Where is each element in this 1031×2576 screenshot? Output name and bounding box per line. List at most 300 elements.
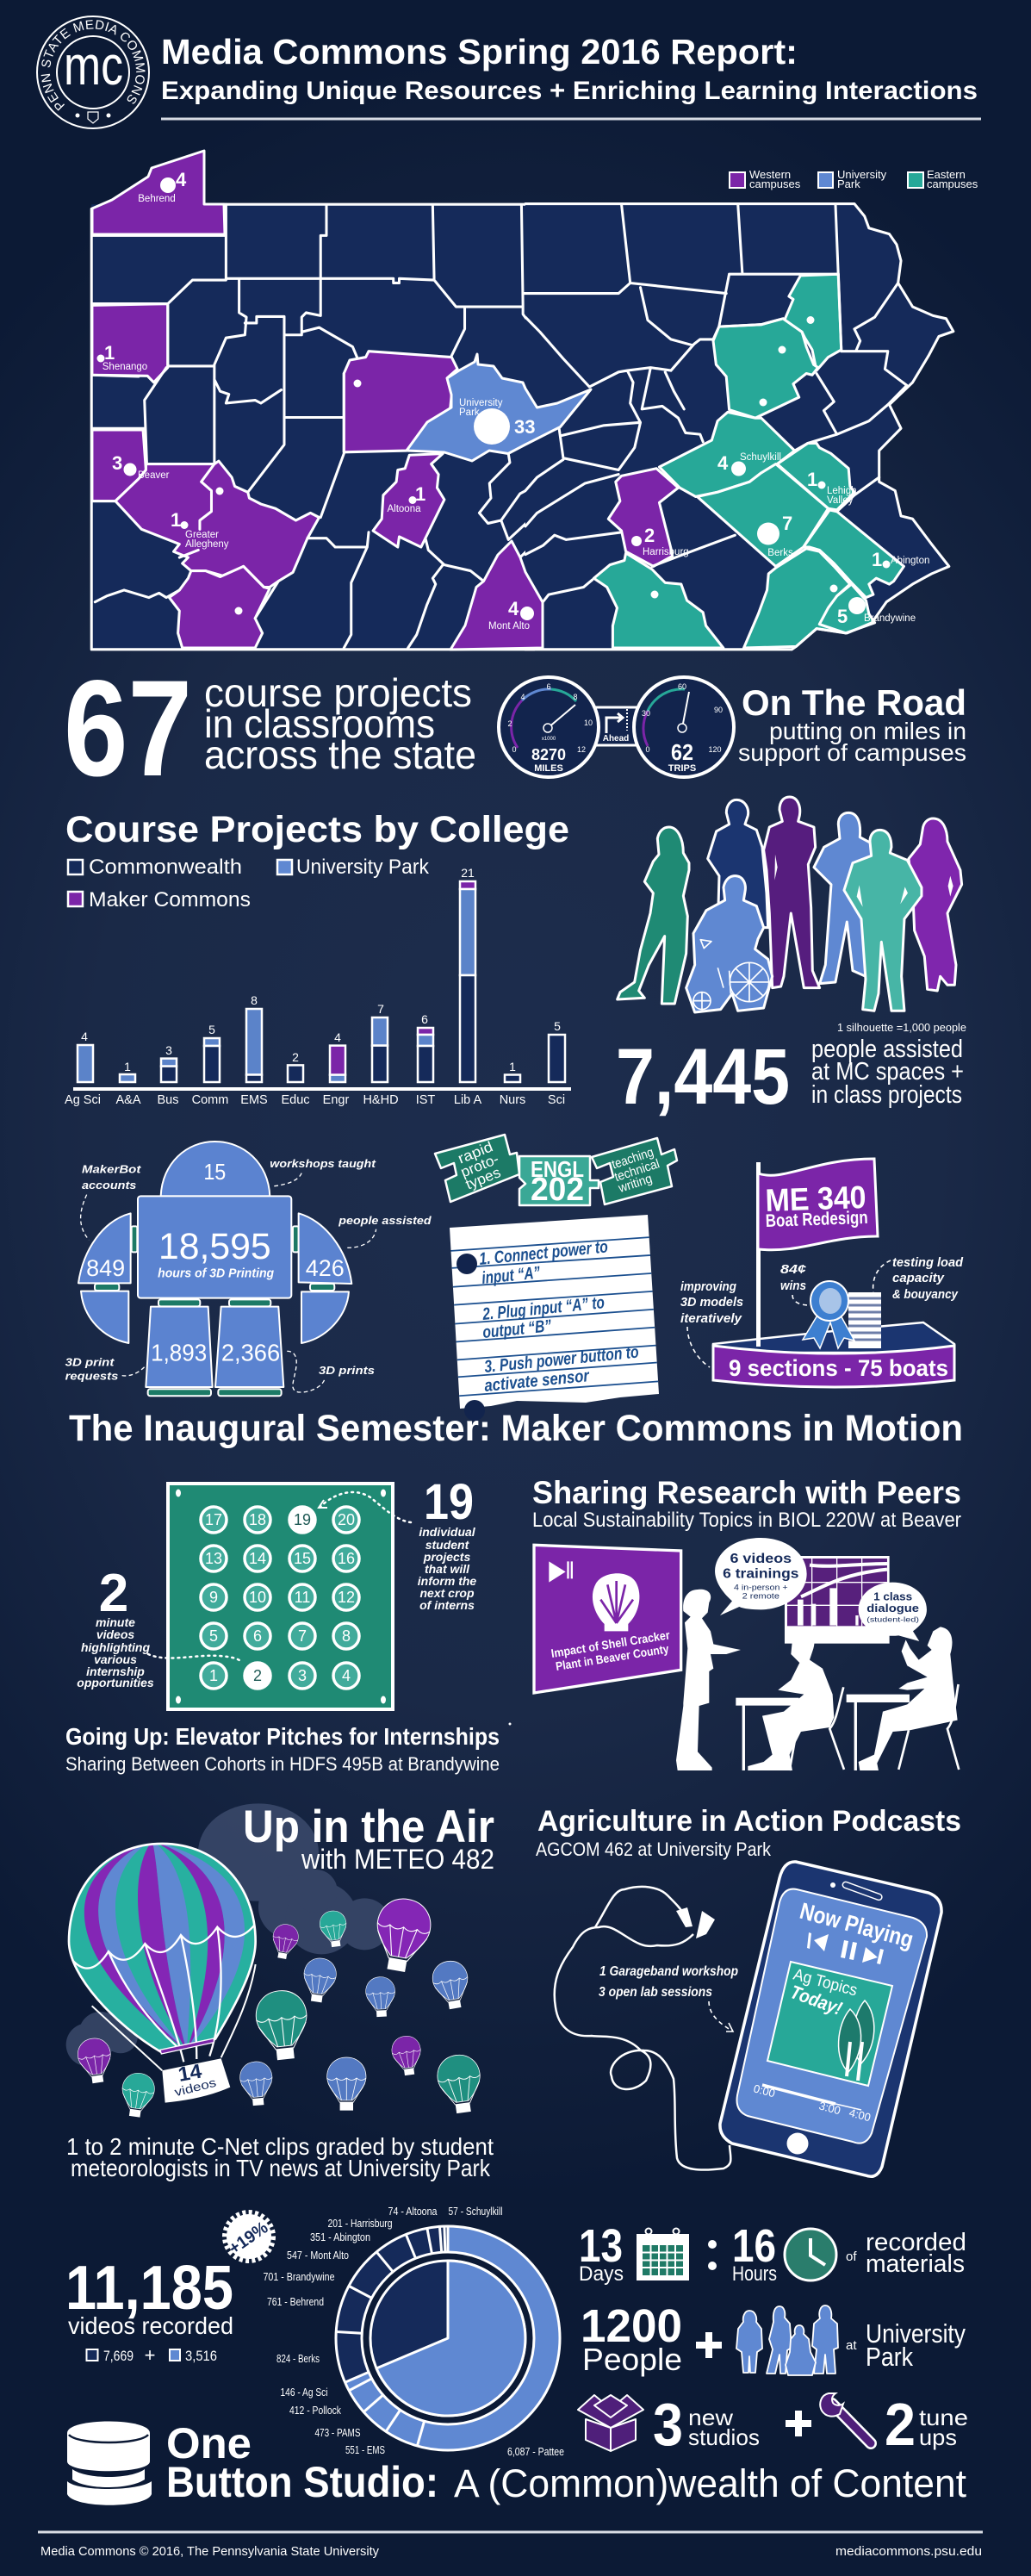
podcast annotation — [599, 1964, 738, 2032]
stat: 11,185 videos recorded: + — [145, 2344, 155, 2366]
boat annotations: & bouyancy — [892, 1287, 959, 1302]
stat: 3 new studios + 2 tune ups: 2 — [885, 2391, 916, 2458]
stat: 7,445 people assisted: at MC spaces + — [811, 1058, 964, 1086]
elevator button numbers: 11 — [295, 1589, 310, 1606]
boat annotations: wins — [780, 1279, 806, 1293]
stat: 1200 people — [581, 2300, 966, 2377]
miles gauge: x1000 — [542, 737, 556, 742]
main balloon: 14 — [177, 2060, 203, 2086]
map: eastern half counties — [525, 204, 953, 650]
main balloon — [63, 1838, 264, 2103]
notebook paper: instructions: 1. Connect power to — [478, 1237, 609, 1269]
region: Behrend Erie county — [92, 151, 225, 234]
map legend: Park — [837, 177, 860, 190]
stat: 2 minute videos: internship — [86, 1664, 145, 1678]
speech bubble: videos and trainings: 4 in-person + — [734, 1584, 788, 1592]
stat: 19 student projects: individual — [419, 1525, 476, 1539]
robot annotations: accounts — [82, 1179, 136, 1192]
stat: 2 minute videos: highlighting — [81, 1640, 150, 1654]
stat: 11,185 videos recorded: 11,185 — [65, 2254, 233, 2323]
phone screen — [737, 1889, 927, 2144]
campus counts and labels: 2 — [644, 525, 655, 546]
donut: labels: 824 - Berks — [276, 2353, 320, 2365]
campus counts and labels: Brandywine — [864, 613, 916, 624]
clouds — [66, 1803, 390, 2066]
speech bubble: videos and trainings: 6 videos — [730, 1552, 792, 1566]
puzzle: ENGL 202 — [519, 1156, 599, 1208]
miles gauge: 2 — [507, 719, 512, 728]
header — [36, 16, 981, 129]
bar chart: course projects by college: 1 — [124, 1060, 131, 1073]
stat: 1200 people: University — [866, 2318, 966, 2349]
miles gauge: 8 — [573, 693, 578, 701]
stat: 19 student projects: that will — [425, 1562, 470, 1576]
elevator button numbers: 9 — [209, 1589, 218, 1606]
stat: 13 days 16 hours: materials — [866, 2250, 965, 2278]
main balloon: scallops and ropes — [72, 1926, 254, 2062]
donut: labels: 146 - Ag Sci — [281, 2386, 327, 2399]
stat: 1200 people: 1200 — [581, 2300, 682, 2352]
stat: 7,445 people assisted: in class projects — [811, 1081, 962, 1109]
icon: calendar — [637, 2228, 689, 2280]
speech bubble: videos and trainings: 6 trainings — [723, 1567, 799, 1582]
silhouette: purple woman — [909, 818, 962, 991]
donut: inner pie — [370, 2261, 525, 2416]
stat: 19 student projects: 19 — [424, 1474, 474, 1530]
stat: 1200 people: Park — [866, 2342, 913, 2372]
bar chart: course projects by college: 5 — [554, 1019, 561, 1033]
stat: 67 course projects: across the state — [204, 732, 476, 777]
classroom scene — [534, 1538, 959, 1770]
ENGL 202 puzzle pieces — [435, 1135, 677, 1208]
heading: On The Road — [738, 682, 966, 766]
silhouette: teal man — [844, 830, 922, 1011]
bar chart: course projects by college: Lib A — [454, 1093, 481, 1107]
campus counts and labels: 4 — [508, 598, 519, 619]
robot numbers: 2,366 — [221, 1339, 280, 1366]
campus counts and labels: Altoona — [387, 504, 421, 514]
heading: Going Up — [65, 1723, 512, 1775]
puzzle: rapid prototypes: rapid — [456, 1138, 495, 1167]
campus counts and labels: Abington — [891, 556, 929, 566]
badge: +19%: +19% — [226, 2218, 272, 2258]
earbud cord — [555, 1887, 730, 2170]
silhouette scale note: 1 silhouette =1,000 people — [837, 1021, 966, 1034]
map legend: Western — [749, 168, 791, 181]
map legend: Eastern — [927, 168, 966, 181]
campus counts and labels: 4 — [176, 169, 187, 190]
elevator button numbers: 6 — [253, 1627, 262, 1645]
logo: Penn State Media Commons seal: PENN STATE MEDIA COMMONS — [41, 20, 145, 111]
bar chart: course projects by college: Comm — [192, 1093, 228, 1107]
donut: labels: 701 - Brandywine — [264, 2271, 335, 2283]
elevator button numbers: 16 — [338, 1550, 355, 1567]
bar chart: course projects by college: 21 — [461, 866, 475, 880]
puzzle: teaching technical writing — [592, 1138, 677, 1204]
paper stack — [848, 1292, 881, 1348]
stat: 7,445 people assisted: people assisted — [811, 1036, 963, 1063]
album card: Ag Topics: Today! — [787, 1981, 845, 2019]
stat: 19 student projects: student — [425, 1538, 470, 1552]
elevator button numbers: 18 — [249, 1511, 266, 1528]
bar chart: course projects by college: 7 — [377, 1002, 384, 1016]
robot numbers: 18,595 — [158, 1226, 271, 1267]
map: western half counties — [91, 204, 534, 650]
notebook paper: instructions: activate sensor — [483, 1366, 591, 1396]
silhouette: teacher — [676, 1590, 741, 1770]
elevator button numbers: 7 — [298, 1627, 307, 1645]
stat: 3 new studios + 2 tune ups: tune — [919, 2405, 968, 2430]
bar chart: course projects by college — [65, 866, 571, 1107]
stat: 2 minute videos — [77, 1564, 242, 1689]
main balloon: envelope stripes — [70, 1845, 255, 2050]
boat annotations: improving — [680, 1279, 736, 1294]
campus counts and labels: 3 — [112, 452, 122, 474]
campus counts and labels: Behrend — [138, 194, 176, 204]
stat: 3 new studios + 2 tune ups: new — [688, 2405, 733, 2430]
earbuds — [676, 1907, 715, 1938]
silhouette: navy man — [708, 800, 768, 928]
stat: 13 days 16 hours: Hours — [732, 2262, 777, 2286]
silhouette: blue man — [814, 812, 879, 984]
elevator button numbers — [205, 1511, 355, 1684]
stat: 7,445 people assisted — [616, 1033, 964, 1121]
One Button Studio: A (Common)wealth of Content — [454, 2461, 966, 2505]
trips gauge: TRIPS — [668, 763, 696, 774]
heading: Course Projects by College: Course Projects by College — [65, 809, 569, 850]
elevator button numbers: 5 — [209, 1627, 218, 1645]
speech bubble: class dialogue: dialogue — [866, 1602, 919, 1615]
silhouettes: people assisted — [618, 797, 962, 1012]
heading: Up in the Air — [243, 1801, 494, 1875]
main balloon: ropes behind — [92, 1964, 256, 2070]
puzzle: rapid prototypes: proto- — [458, 1150, 501, 1180]
playback controls — [807, 1932, 884, 1964]
elevator button numbers: 10 — [249, 1589, 266, 1606]
miles gauge — [499, 677, 599, 777]
elevator button numbers: 12 — [338, 1589, 355, 1606]
stat: 2 minute videos: various — [94, 1652, 137, 1666]
campus counts and labels: 1 — [104, 342, 115, 364]
boat: ME 340 flag and hull: ME 340 — [765, 1179, 866, 1218]
donut: labels: 74 - Altoona — [388, 2206, 438, 2218]
silhouette: person in wheelchair — [686, 876, 773, 1012]
puzzle: teaching technical writing: teaching — [610, 1145, 655, 1173]
footer: mediacommons.psu.edu — [835, 2544, 982, 2559]
subtitle: Expanding Unique Resources + Enriching Learning Interactions — [161, 77, 978, 105]
region: Franklin county Mont Alto — [450, 541, 543, 650]
campus counts and labels: Valley — [827, 495, 854, 506]
footer — [38, 2531, 983, 2559]
bar chart: course projects by college: 5 — [208, 1023, 215, 1036]
projected slide: Impact of Shell Cracker — [550, 1627, 671, 1660]
heading: On The Road: On The Road — [742, 682, 966, 723]
trips gauge — [634, 677, 734, 777]
miles gauge: 6 — [546, 682, 551, 691]
bar chart: course projects by college: EMS — [240, 1093, 268, 1107]
donut: labels: 201 - Harrisburg — [327, 2218, 393, 2230]
campus counts and labels: 1 — [807, 469, 817, 490]
speech bubble: videos and trainings: 2 remote — [742, 1592, 779, 1601]
projected slide — [534, 1545, 681, 1693]
miles gauge: 8270 — [531, 746, 566, 763]
campus counts and labels: 4 — [717, 452, 729, 474]
stat: 2 minute videos: 2 — [99, 1564, 128, 1623]
gauges: On The Road — [499, 677, 734, 777]
phone — [720, 1862, 941, 2176]
boat: ME 340 flag and hull — [680, 1159, 964, 1387]
campus counts and labels: Greater — [185, 530, 219, 540]
campus counts and labels: 1 — [872, 549, 882, 570]
bar chart legend: Maker Commons — [89, 888, 251, 912]
puzzle: teaching technical writing: writing — [616, 1171, 654, 1196]
campus counts and labels: 1 — [415, 483, 425, 505]
campus counts and labels: 7 — [782, 513, 792, 534]
puzzle: ENGL 202: 202 — [531, 1172, 584, 1208]
stat: 19 student projects: of interns — [419, 1598, 475, 1612]
icon: box — [578, 2395, 643, 2451]
speech bubble: videos and trainings — [715, 1538, 807, 1615]
campus counts and labels: 33 — [514, 416, 535, 438]
speech bubble: class dialogue: (student-led) — [866, 1615, 919, 1624]
flag pole — [756, 1162, 761, 1347]
campus counts and labels — [96, 169, 929, 632]
stat: 2 minute videos: opportunities — [77, 1676, 154, 1689]
stat: 11,185 videos recorded — [65, 2254, 233, 2366]
stat: 19 student projects — [319, 1474, 476, 1612]
stat: 13 days 16 hours: 16 — [732, 2220, 776, 2272]
miles gauge: 4 — [520, 693, 525, 701]
campus counts and labels: Schuylkill — [740, 452, 781, 463]
puzzle: teaching technical writing: technical — [612, 1156, 661, 1185]
robot numbers: hours of 3D Printing — [158, 1266, 274, 1280]
stat: 3 new studios + 2 tune ups: ups — [919, 2424, 957, 2450]
campus counts and labels: Shenango — [102, 362, 147, 372]
robot joints — [95, 1226, 334, 1396]
robot annotations: 3D print — [65, 1356, 115, 1369]
map of Pennsylvania campuses — [91, 151, 978, 650]
balloons caption: meteorologists in TV news at University Park — [71, 2155, 491, 2181]
speech bubble: class dialogue: 1 class — [873, 1590, 912, 1602]
donut: labels: 351 - Abington — [310, 2231, 370, 2243]
robot annotations: workshops taught — [270, 1157, 376, 1170]
boat annotations: 84¢ — [780, 1262, 807, 1277]
trips gauge: 60 — [678, 682, 686, 691]
map legend: University — [837, 168, 887, 181]
boat annotations: testing load — [892, 1255, 964, 1270]
miles gauge: 12 — [577, 745, 586, 754]
donut chart: videos by location — [264, 2206, 564, 2458]
stat: 3 new studios + 2 tune ups — [578, 2391, 968, 2458]
album card: Ag Topics: Ag Topics — [792, 1966, 860, 2000]
trips gauge: 62 — [671, 739, 693, 765]
notebook paper: instructions: 3. Push power button to — [483, 1343, 640, 1377]
puzzle: ENGL 202: ENGL — [531, 1156, 584, 1182]
balloons caption: 1 to 2 minute C-Net clips graded by student — [66, 2133, 494, 2160]
bar chart legend: University Park — [296, 856, 430, 879]
donut: labels: 473 - PAMS — [315, 2427, 360, 2439]
puzzle: rapid prototypes: types — [463, 1164, 503, 1193]
elevator button numbers: 15 — [294, 1550, 311, 1567]
campus counts and labels: Berks — [767, 548, 793, 558]
elevator button numbers: 17 — [205, 1511, 222, 1528]
icon: clock — [785, 2229, 836, 2280]
boat: ME 340 flag and hull: Boat Redesign — [765, 1208, 868, 1231]
bar chart legend: Commonwealth — [89, 856, 242, 879]
campus counts and labels: Mont Alto — [488, 621, 530, 632]
stat: 19 student projects: inform the — [418, 1574, 476, 1588]
donut: labels: 761 - Behrend — [267, 2296, 324, 2308]
robot annotations: MakerBot — [82, 1163, 141, 1176]
robot numbers: 15 — [203, 1159, 226, 1185]
elevator button numbers: 13 — [205, 1550, 222, 1567]
bar chart: course projects by college: 8 — [251, 993, 258, 1007]
stat: 2 minute videos: videos — [96, 1627, 134, 1641]
robot numbers: 426 — [306, 1255, 345, 1281]
robot annotations: requests — [65, 1370, 118, 1383]
bar chart: course projects by college: 4 — [81, 1030, 88, 1043]
stat: 13 days 16 hours: of — [846, 2249, 857, 2264]
stat: 13 days 16 hours: 13 — [579, 2220, 623, 2272]
robot numbers: 1,893 — [151, 1339, 207, 1366]
boat annotations: iteratively — [680, 1311, 742, 1326]
album card: Ag Topics — [767, 1962, 892, 2086]
heading: On The Road: putting on miles in — [769, 718, 966, 744]
notebook paper: instructions — [450, 1215, 663, 1421]
bar chart: course projects by college: 4 — [334, 1030, 341, 1044]
icon: small people group — [736, 2305, 838, 2375]
One Button Studio: One — [166, 2419, 252, 2467]
heading: Sharing Research with Peers: Sharing Research with Peers — [532, 1475, 961, 1510]
robot infographic: 3D printing — [65, 1142, 432, 1396]
elevator button numbers: 8 — [342, 1627, 351, 1645]
bar chart: course projects by college: Bus — [157, 1093, 179, 1107]
boat banner — [713, 1346, 954, 1387]
donut: labels: 551 - EMS — [345, 2444, 385, 2456]
heading: Going Up: Going Up: Elevator Pitches for Internships — [65, 1723, 500, 1750]
One Button Studio — [67, 2419, 966, 2506]
stat: 11,185 videos recorded: 3,516 — [185, 2348, 217, 2364]
projected slide: Plant in Beaver County — [555, 1641, 670, 1673]
logo: Penn State Media Commons seal: mc — [64, 34, 123, 96]
progress bar: 3:00 — [817, 2099, 842, 2117]
stat: 7,445 people assisted: 7,445 — [616, 1033, 790, 1121]
miles gauge: MILES — [534, 763, 563, 774]
bar chart: course projects by college: Ag Sci — [65, 1093, 101, 1107]
bar chart: course projects by college: Sci — [548, 1093, 565, 1107]
main balloon: outline — [69, 1844, 256, 2052]
title: Media Commons Spring 2016 Report: — [161, 32, 798, 72]
One Button Studio: Button Studio: — [166, 2458, 438, 2506]
phone speaker and home button — [787, 1881, 883, 2154]
bar chart legend — [68, 856, 430, 912]
heading: Sharing Research with Peers — [532, 1475, 961, 1532]
boat annotations: capacity — [892, 1271, 945, 1285]
ahead road sign: Ahead — [603, 734, 629, 744]
elevator button numbers: 20 — [338, 1511, 355, 1528]
footer: Media Commons © 2016, The Pennsylvania State University — [40, 2544, 379, 2559]
heading: The Inaugural Semester: The Inaugural Semester: Maker Commons in Motion — [69, 1408, 963, 1449]
heading: Sharing Research with Peers: Local Sustainability Topics in BIOL 220W at Beaver — [532, 1509, 961, 1532]
elevator button numbers: 3 — [298, 1667, 307, 1684]
map legend: campuses — [927, 177, 978, 190]
notebook paper: instructions: output “B” — [481, 1316, 552, 1342]
bar chart: course projects by college: A&A — [115, 1093, 141, 1107]
bar chart: course projects by college: 1 — [509, 1060, 516, 1073]
bar chart: course projects by college: 3 — [165, 1043, 172, 1057]
miles gauge: 10 — [584, 719, 593, 727]
donut: labels: 6,087 - Pattee — [507, 2446, 564, 2458]
elevator button numbers: 4 — [342, 1667, 351, 1684]
stat: 19 student projects: next crop — [419, 1586, 475, 1600]
silhouette: student two at desk — [847, 1627, 959, 1770]
stat: 19 student projects: projects — [423, 1550, 470, 1564]
robot annotations — [65, 1157, 432, 1383]
elevator button numbers: 1 — [209, 1667, 218, 1684]
progress bar: 4:00 — [848, 2106, 873, 2124]
robot numbers — [86, 1159, 345, 1366]
heading: Up in the Air: Up in the Air — [243, 1801, 494, 1852]
donut: labels: 412 - Pollock — [289, 2405, 342, 2417]
boat annotations: 3D models — [680, 1295, 743, 1310]
campus counts and labels: Lehigh — [827, 486, 857, 496]
balloons caption — [66, 2133, 494, 2181]
boat annotations — [680, 1255, 964, 1326]
podcast annotation: 3 open lab sessions — [599, 1985, 712, 2000]
icon: wrench — [820, 2393, 871, 2443]
elevator button numbers: 19 — [294, 1511, 311, 1528]
stat: 3 new studios + 2 tune ups: 3 — [653, 2391, 683, 2458]
small balloons — [76, 1895, 485, 2119]
donut: labels: 547 - Mont Alto — [287, 2249, 349, 2262]
progress bar: 0:00 — [752, 2081, 777, 2100]
robot body parts — [78, 1142, 351, 1387]
map legend — [730, 168, 978, 190]
campus counts and labels: University — [459, 398, 503, 408]
heading: Up in the Air: with METEO 482 — [301, 1844, 494, 1875]
notebook paper: instructions: input “A” — [481, 1263, 541, 1288]
stat: 13 days 16 hours: Days — [579, 2262, 624, 2286]
trips gauge: 30 — [642, 709, 650, 718]
robot annotations: people assisted — [338, 1214, 432, 1227]
elevator button numbers: 14 — [249, 1550, 266, 1567]
trips gauge: 120 — [708, 745, 722, 754]
miles gauge: 0 — [512, 745, 517, 754]
puzzle: rapid prototypes — [435, 1135, 519, 1202]
heading: On The Road: support of campuses — [738, 739, 966, 766]
main balloon: banner — [162, 2058, 230, 2103]
stat: 67 course projects: in classrooms — [204, 701, 435, 746]
stat: 2 minute videos: minute — [96, 1615, 135, 1629]
bar chart: course projects by college: Educ — [281, 1093, 310, 1107]
donut: labels: 57 - Schuylkill — [448, 2206, 503, 2218]
silhouette: student one at desk — [736, 1630, 844, 1770]
now playing text: Now Playing — [797, 1898, 916, 1953]
stat: 67 course projects: 67 — [64, 651, 192, 805]
stat: 3 new studios + 2 tune ups: studios — [688, 2424, 760, 2450]
notebook paper: instructions: 2. Plug input “A” to — [481, 1293, 606, 1324]
boat: ME 340 flag and hull: 9 sections - 75 boats — [729, 1355, 948, 1381]
robot numbers: 849 — [86, 1255, 125, 1281]
silhouette: dark purple man — [764, 797, 820, 988]
heading: Agriculture in Action Podcasts: AGCOM 462 at University Park — [536, 1839, 772, 1860]
ahead road sign — [595, 707, 638, 745]
bar chart: course projects by college: Engr — [323, 1093, 349, 1107]
robot annotations: 3D prints — [319, 1364, 375, 1377]
factory window — [785, 1556, 890, 1644]
stat: 67 course projects: course projects — [204, 670, 472, 715]
stat: 67 course projects — [64, 651, 476, 805]
